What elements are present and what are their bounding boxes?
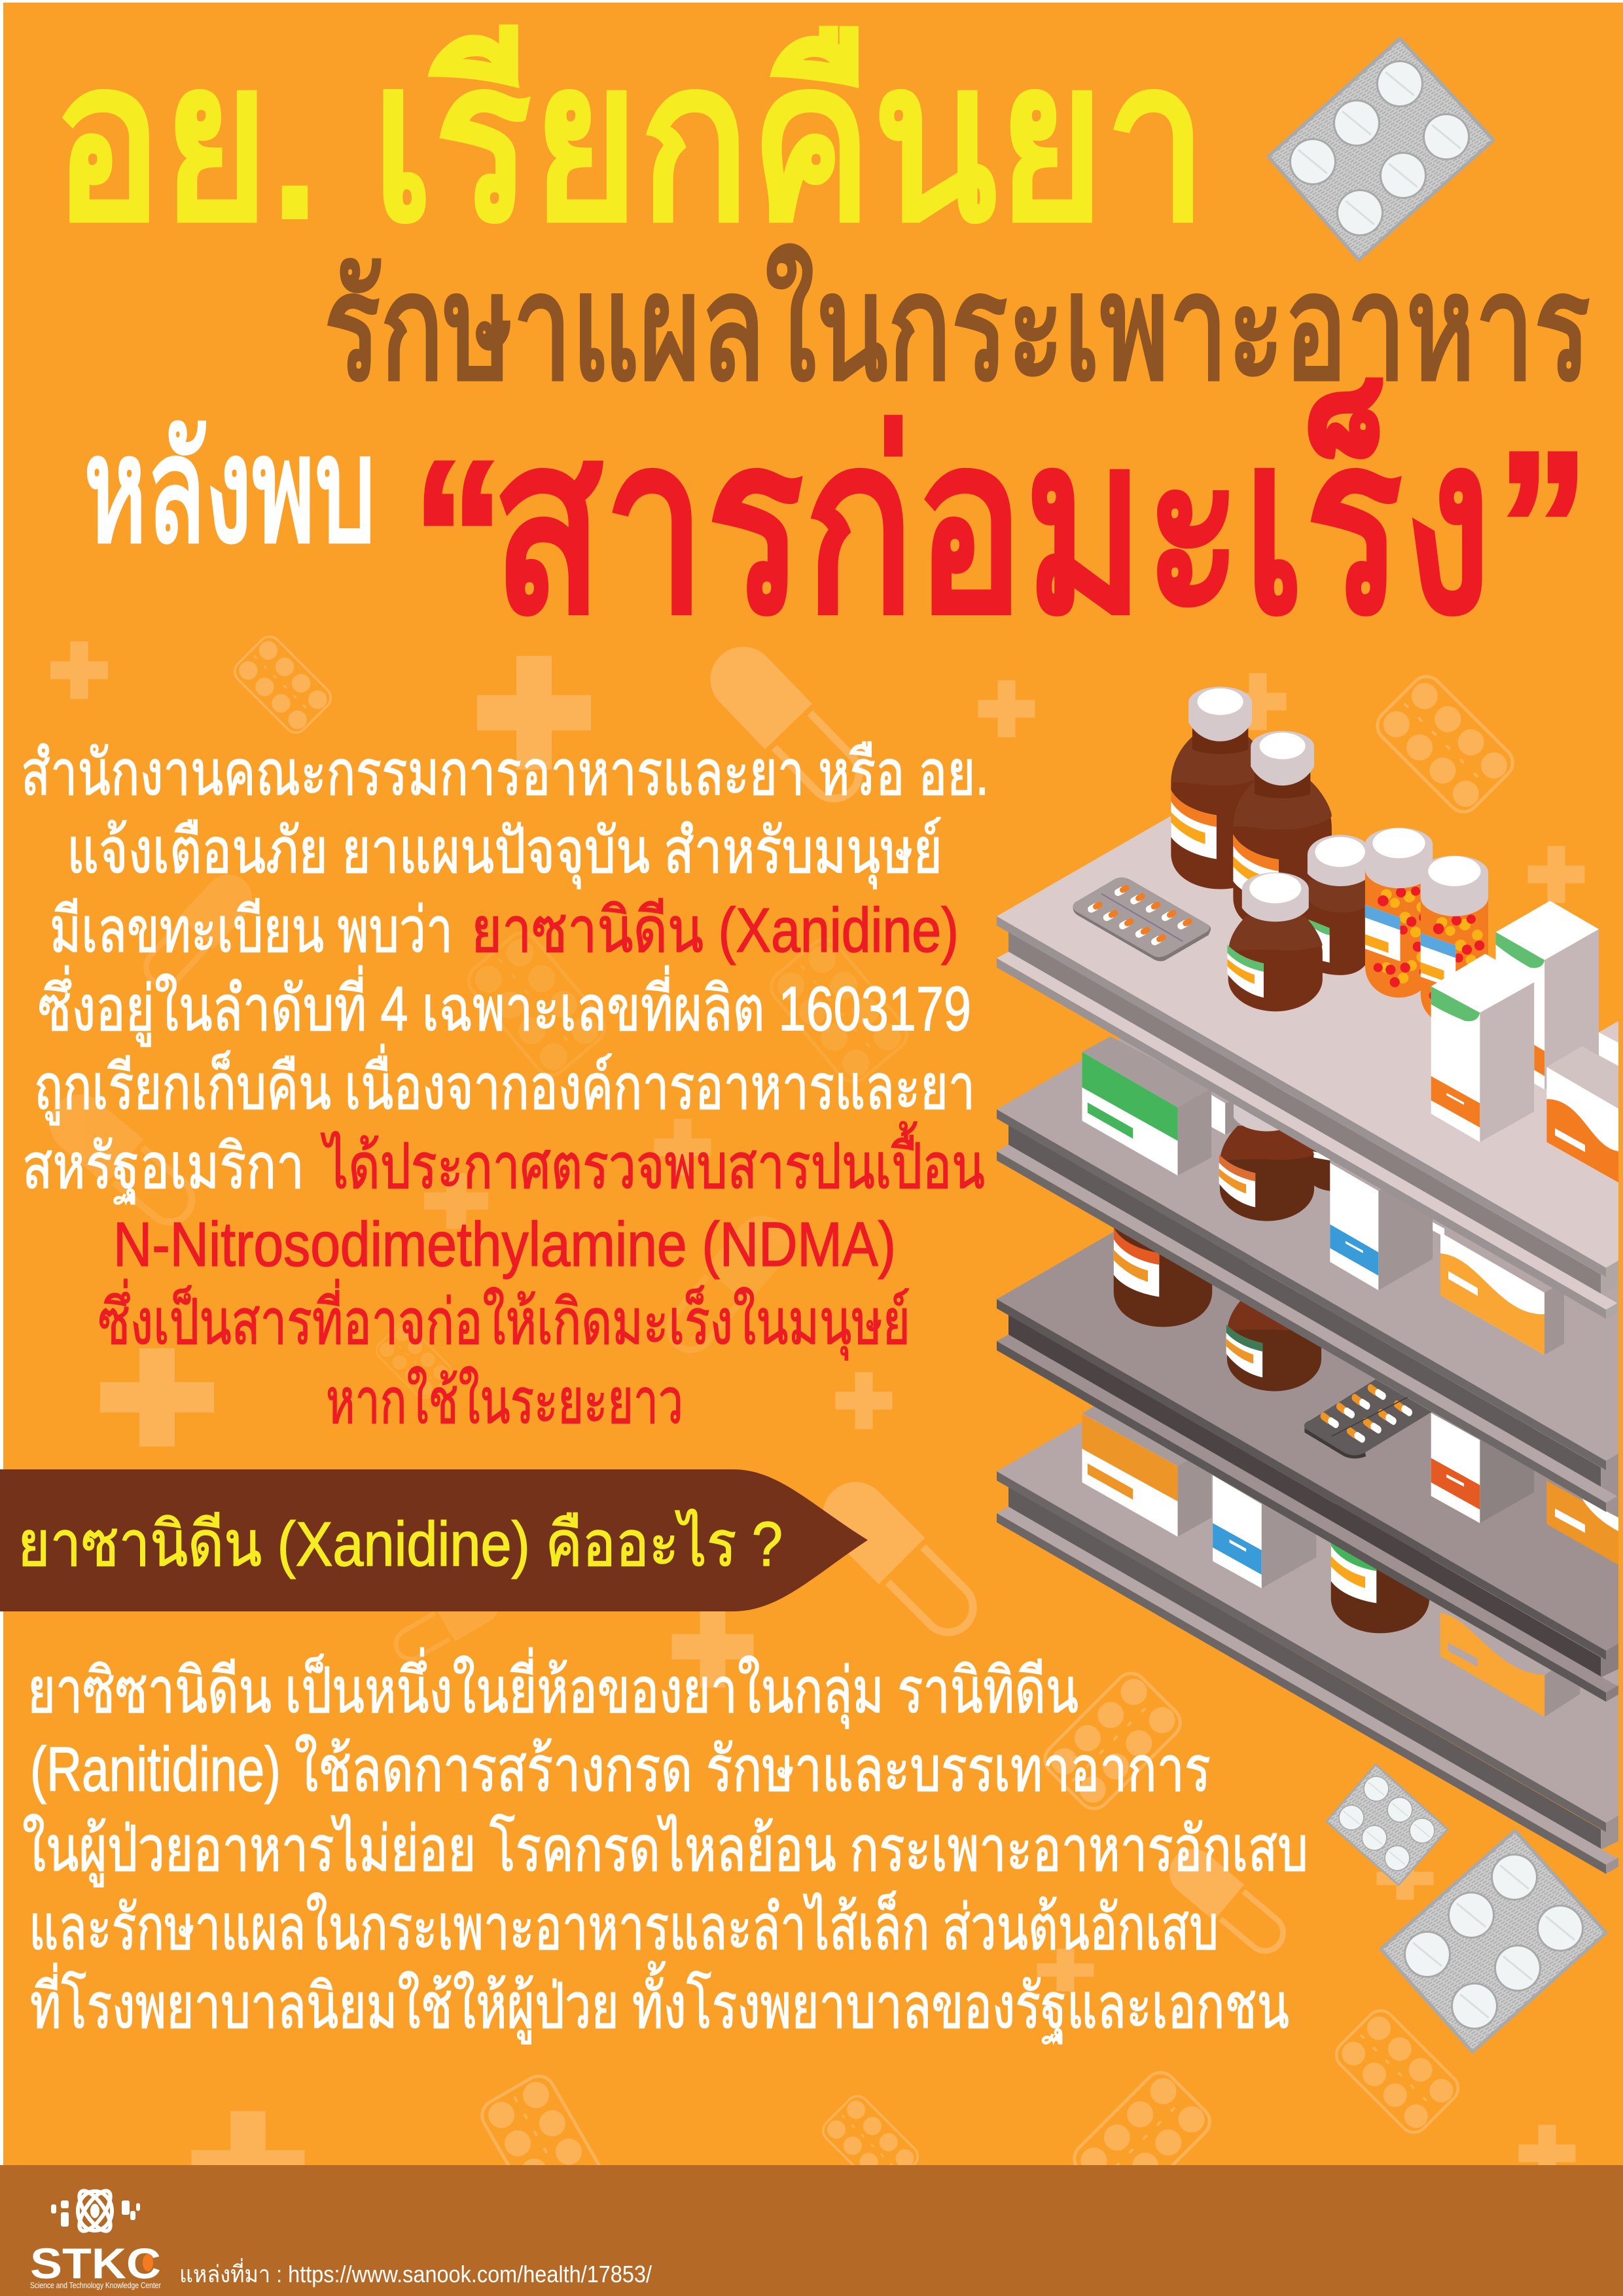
wave box right — [1546, 1046, 1618, 1183]
shelf 4 with products — [997, 1370, 1618, 1874]
text block: announcement: ได้ประกาศตรวจพบสารปนเปื้อน — [321, 1121, 985, 1202]
logo: STKC: Science and Technology Knowledge Center — [30, 2280, 162, 2290]
shelf 3 with products — [997, 1124, 1623, 1702]
text block: announcement: หากใช้ในระยะยาว — [326, 1367, 683, 1437]
logo: STKC: STKC — [30, 2239, 161, 2287]
text block: drug description: และรักษาแผลในกระเพาะอาหารและลำไส้เล็ก ส่วนต้นอักเสบ — [29, 1890, 1219, 1963]
footer bar — [0, 2165, 1623, 2296]
title line 1: อย. เรียกคืนยา — [52, 16, 1207, 268]
icon: tablet blister top right — [1268, 39, 1493, 260]
illustration: pharmacy shelves with medicine — [997, 687, 1623, 1874]
title line 3 highlight: ” — [1497, 406, 1589, 648]
icon: small tablet blister bottom — [1327, 1765, 1448, 1885]
background pattern: plus signs, blister outlines and capsules — [38, 632, 1585, 2225]
tall box back — [1496, 901, 1599, 1090]
tall box front — [1431, 954, 1534, 1142]
text block: drug description: ยาซิซานิดีน เป็นหนึ่งในยี่ห้อของยาในกลุ่ม รานิทิดีน — [27, 1647, 1079, 1729]
capsule blister pack on shelf — [1073, 878, 1211, 961]
title line 3 highlight: “ — [412, 416, 504, 657]
text block: announcement: สำนักงานคณะกรรมการอาหารและยา หรือ อย. — [21, 738, 989, 808]
text block: announcement: มีเลขทะเบียน พบว่า — [50, 895, 453, 965]
shelf 1 with products — [997, 687, 1618, 1319]
text block: announcement: สหรัฐอเมริกา — [22, 1132, 304, 1205]
shelf 2 with products — [997, 1008, 1618, 1512]
text block: announcement: ซึ่งอยู่ในลำดับที่ 4 เฉพาะเลขที่ผลิต 1603179 — [38, 965, 971, 1047]
arrow banner — [0, 1469, 868, 1611]
text block: announcement: ยาซานิดีน (Xanidine) — [471, 895, 959, 965]
icon: large tablet blister bottom — [1381, 1831, 1606, 2052]
text block: announcement: N-Nitrosodimethylamine (NDMA) — [113, 1210, 896, 1280]
text block: drug description — [22, 1647, 1308, 2045]
brown bottle with green label — [1308, 835, 1365, 975]
text block: drug description: (Ranitidine) ใช้ลดการสร้างกรด รักษาและบรรเทาอาการ — [30, 1734, 1211, 1804]
far right white box — [1599, 1021, 1618, 1067]
title line 3 prefix: หลังพบ — [84, 408, 376, 573]
logo: STKC — [30, 2186, 162, 2290]
text block: announcement: ถูกเรียกเก็บคืน เนื่องจากองค์การอาหารและยา — [34, 1044, 975, 1125]
text block: announcement: แจ้งเตือนภัย ยาแผนปัจจุบัน สำหรับมนุษย์ — [67, 816, 942, 889]
text block: announcement — [21, 738, 989, 1437]
text block: announcement: ซึ่งเป็นสารที่อาจก่อให้เกิดมะเร็งในมนุษย์ — [98, 1279, 910, 1361]
arrow banner: ยาซานิดีน (Xanidine) คืออะไร ? — [18, 1509, 783, 1579]
source link: แหล่งที่มา : https://www.sanook.com/health/17853/ — [179, 2258, 652, 2287]
